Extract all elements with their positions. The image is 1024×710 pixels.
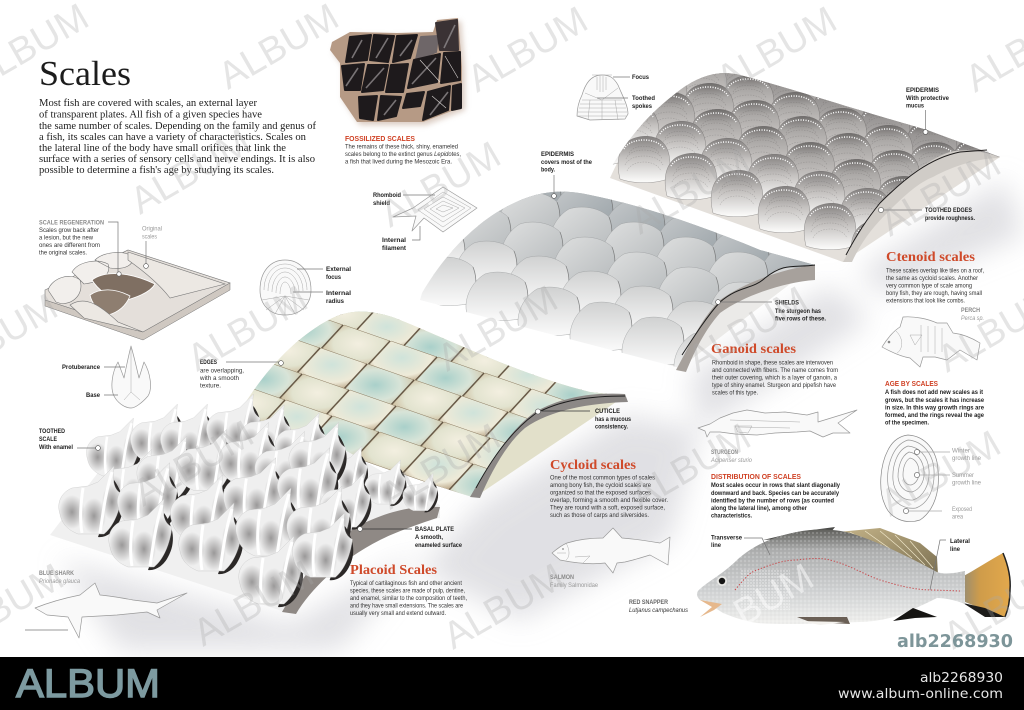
watermarks: ALBUM — [436, 556, 571, 658]
ganoid scales text: Ganoid scales — [711, 342, 797, 357]
watermarks: ALBUM — [460, 0, 595, 101]
epidermis label ganoid — [541, 152, 593, 198]
footer url: www.album-online.com — [838, 686, 1003, 702]
distribution of scales text: Most scales occur in rows that slant diagonally — [711, 483, 841, 489]
watermarks: ALBUM — [124, 121, 258, 223]
cuticle band — [470, 394, 628, 498]
sturgeon label — [710, 450, 753, 464]
rhomboid shield diagram: Internal — [382, 238, 406, 244]
watermarks: ALBUM — [430, 278, 565, 380]
external/internal focus diagram: radius — [326, 299, 345, 305]
external/internal focus diagram: Internal — [326, 291, 351, 297]
cuticle label: CUTICLE — [595, 409, 620, 415]
cuticle label: consistency. — [595, 424, 628, 430]
toothed scale label: TOOTHED — [39, 429, 66, 435]
soft shadows under sheets — [60, 180, 1024, 650]
ganoid scales text: scales of this type. — [712, 390, 758, 396]
edges label: with a smooth — [199, 376, 239, 382]
intro paragraph: a fish, its scales can have a variety of characteristics. Scales on — [39, 132, 307, 143]
blue shark label — [39, 571, 81, 585]
cuticle label: has a mucous — [595, 417, 632, 423]
growth ring scale diagram: area — [952, 514, 964, 520]
red snapper fish photograph — [695, 525, 1010, 625]
watermarks: ALBUM — [186, 553, 321, 655]
fossilized scales text: scales belong to the extinct genus Lepidotes, — [345, 152, 461, 158]
age by scales text: formed, and the rings reveal the age — [885, 413, 985, 419]
cycloid scales text — [550, 458, 668, 519]
growth ring scale diagram — [881, 435, 982, 522]
watermarks: ALBUM — [126, 413, 261, 515]
toothed edges label: provide roughness. — [925, 216, 975, 222]
title: Scales — [39, 54, 131, 93]
shields band — [676, 265, 815, 372]
age by scales text: A fish does not add new scales as it — [885, 390, 983, 396]
intro paragraph: possible to determine a fish's age by studying its scales. — [39, 165, 274, 176]
watermarks: ALBUM — [710, 0, 844, 101]
scale regeneration block: SCALE REGENERATION — [39, 220, 104, 226]
epidermis label ganoid: body. — [541, 168, 555, 174]
illustration: ganoid scales sheet — [420, 192, 816, 372]
age by scales text: grows, but the scales it has increase — [885, 398, 985, 404]
ctenoid scales text: very common type of scale among — [886, 284, 972, 290]
ctenoid scales text — [886, 250, 984, 304]
footer bar — [0, 657, 1024, 710]
red snapper label: RED SNAPPER — [629, 600, 669, 606]
salmon label — [550, 575, 599, 589]
blue shark label: Prionace glauca — [39, 579, 81, 585]
tail — [960, 553, 1010, 617]
edges label: EDGES — [200, 360, 217, 366]
cycloid scales text: organized so that the exposed surfaces — [550, 490, 651, 496]
salmon label: Family Salmonidae — [550, 583, 599, 589]
placoid scales text: usually very small and extend outward. — [350, 611, 446, 617]
watermarks: ALBUM — [624, 416, 758, 518]
ctenoid scales text: extensions that look like combs. — [886, 298, 965, 304]
rhomboid shield diagram: shield — [373, 201, 390, 207]
ganoid scales text: their outer covering, which is a layer of ganoin, a — [712, 376, 838, 382]
scale regeneration block: Scales grow back after — [39, 228, 99, 234]
distribution of scales text: along the lateral line), among other — [711, 506, 808, 512]
growth ring scale diagram: Exposed — [952, 507, 972, 513]
ganoid scales text: and connected with fibers. The name comes from — [712, 368, 838, 374]
red snapper label — [629, 600, 688, 614]
ganoid scales text: Rhomboid in shape, these scales are interwoven — [712, 360, 833, 366]
intro paragraph: the same number of scales. Depending on the family and genus of — [39, 121, 316, 132]
cycloid scales text: overlap, forming a smooth and flexible cover. — [550, 498, 668, 504]
ctenoid scales text: the same as cycloid scales. Another — [886, 276, 978, 282]
body — [697, 529, 965, 624]
placoid scales text: species, these scales are made of pulp, dentine, — [350, 588, 465, 594]
basal plate label: BASAL PLATE — [415, 527, 454, 533]
shields label — [716, 300, 826, 322]
red snapper label: Lutjanus campechanus — [629, 608, 688, 614]
age by scales text: of the specimen. — [885, 420, 929, 426]
distribution of scales text: identified by the number of rows (as counted — [711, 498, 834, 504]
toothed edge band — [843, 150, 1000, 262]
fossilized scales text — [345, 136, 461, 166]
watermarks: ALBUM — [680, 279, 815, 381]
watermarks: ALBUM — [180, 278, 315, 380]
scale regeneration block: ones are different from — [39, 243, 100, 249]
illustration: ctenoid scales sheet — [610, 73, 1000, 262]
age by scales text: in size. In this way growth rings are — [885, 406, 985, 412]
lateral line label: line — [950, 547, 961, 553]
lateral line label: Lateral — [950, 539, 970, 545]
distribution of scales text: downward and back. Species can be accurately — [711, 491, 840, 497]
transverse line label: Transverse — [711, 536, 743, 542]
toothed scale label: SCALE — [39, 437, 57, 443]
growth ring scale diagram: growth line — [952, 480, 982, 486]
scale regeneration block: the original scales. — [39, 250, 87, 256]
transverse line label: line — [711, 543, 722, 549]
watermarks: ALBUM — [374, 134, 508, 236]
salmon outline icon — [552, 528, 670, 573]
perch label — [961, 308, 984, 322]
placoid scales text: Placoid Scales — [350, 563, 438, 578]
placoid scales text: and enamel, similar to the composition of teeth, — [350, 596, 467, 602]
eye — [717, 576, 727, 586]
intro paragraph: the lateral line of the body have small orifices that link the — [39, 143, 286, 154]
distribution of scales text: DISTRIBUTION OF SCALES — [711, 474, 801, 481]
ctenoid scales text: bony fish, they are rough, having small — [886, 291, 982, 297]
cycloid scales text: Cycloid scales — [550, 458, 637, 473]
fossilized scales text: The remains of these thick, shiny, enameled — [345, 144, 458, 150]
fossilized scales text: a fish that lived during the Mesozoic Era. — [345, 160, 452, 166]
watermarks: ALBUM — [374, 416, 508, 518]
age by scales text: AGE BY SCALES — [885, 381, 938, 388]
watermarks: ALBUM — [686, 556, 821, 658]
epidermis label ganoid: EPIDERMIS — [541, 152, 574, 158]
ctenoid scales text: Ctenoid scales — [886, 250, 976, 265]
cycloid scales text: among bony fish, the cycloid scales are — [550, 483, 652, 489]
epidermis label ctenoid: EPIDERMIS — [906, 88, 939, 94]
scale regeneration block: a lesion, but the new — [39, 236, 94, 242]
distribution of scales text: characteristics. — [711, 514, 752, 520]
age by scales text — [885, 381, 985, 426]
external/internal focus diagram: External — [326, 267, 351, 273]
basal plate label: enameled surface — [415, 543, 463, 549]
image id stamp: alb2268930 — [897, 631, 1013, 652]
toothed scale label: With enamel — [39, 445, 73, 451]
basal plate label — [358, 527, 463, 549]
placoid scales text: Typical of cartilaginous fish and other ancient — [350, 581, 462, 587]
watermarks: ALBUM — [874, 423, 1008, 525]
perch label: PERCH — [961, 308, 980, 314]
ctenoid scales text: These scales overlap like tiles on a roof, — [886, 268, 984, 274]
perch outline icon — [882, 317, 980, 367]
edges label: texture. — [200, 384, 221, 390]
fossil photograph — [330, 18, 465, 125]
focus and spokes diagram — [577, 75, 655, 120]
sturgeon label: Acipenser sturio — [710, 458, 753, 464]
regeneration illustration — [45, 222, 230, 340]
edges label: are overlapping, — [200, 368, 244, 374]
illustration: cycloid scales sheet — [247, 312, 628, 498]
footer id: alb2268930 — [920, 670, 1003, 686]
shark outline icon — [25, 583, 187, 638]
focus and spokes diagram: Toothed — [632, 96, 655, 102]
toothed scale diagram — [62, 346, 151, 408]
intro paragraph: of transparent plates. All fish of a given species have — [39, 110, 262, 120]
salmon label: SALMON — [550, 575, 574, 581]
mouth — [700, 600, 722, 617]
placoid scales text: and they have small extensions. The scales are — [350, 604, 464, 610]
lower fins — [893, 608, 937, 621]
growth ring scale diagram: Summer — [952, 473, 974, 479]
sturgeon outline icon — [698, 410, 857, 437]
dorsal fin — [838, 528, 938, 575]
edges label — [199, 360, 283, 390]
rhomboid shield diagram: filament — [382, 246, 406, 252]
fossilized scales text: FOSSILIZED SCALES — [345, 136, 415, 143]
intro paragraph — [39, 98, 316, 176]
sturgeon label: STURGEON — [711, 450, 738, 456]
perch label: Perca sp. — [961, 316, 984, 322]
shields label: SHIELDS — [775, 300, 799, 306]
footer logo: ALBUM — [16, 662, 160, 706]
toothed scale diagram: Base — [86, 393, 101, 399]
cycloid scales text: They are round with a soft, exposed surface, — [550, 506, 665, 512]
cuticle label — [535, 409, 632, 430]
blue shark label: BLUE SHARK — [39, 571, 75, 577]
external/internal focus diagram — [260, 260, 351, 315]
watermarks: ALBUM — [624, 141, 758, 243]
focus and spokes diagram: Focus — [632, 75, 650, 81]
toothed edges label — [878, 207, 975, 222]
scale regeneration block: Original — [142, 226, 162, 232]
toothed scale diagram: Protuberance — [62, 365, 101, 371]
lateral line — [735, 558, 960, 591]
watermarks: ALBUM — [874, 143, 1008, 245]
basal plate label: A smooth, — [415, 535, 443, 541]
transverse line label — [711, 536, 770, 555]
cycloid scales text: such as those of carps and silversides. — [550, 513, 649, 519]
distribution of scales text — [711, 474, 841, 520]
epidermis label ganoid: covers most of the — [541, 160, 593, 166]
scale regeneration block — [39, 220, 162, 256]
epidermis label ctenoid — [906, 88, 950, 134]
lateral line label — [930, 539, 970, 590]
basal plate — [50, 430, 440, 612]
shields label: five rows of these. — [775, 316, 826, 322]
focus and spokes diagram: spokes — [632, 104, 653, 110]
cycloid scales text: One of the most common types of scales — [550, 476, 655, 482]
epidermis label ctenoid: With protective — [906, 96, 950, 102]
intro paragraph: Most fish are covered with scales, an external layer — [39, 98, 257, 109]
illustration: placoid toothed scales sheet — [50, 394, 440, 614]
growth ring scale diagram: Winter — [952, 448, 970, 454]
ganoid scales text — [711, 342, 838, 396]
external/internal focus diagram: focus — [326, 275, 342, 281]
placoid scales text — [350, 563, 467, 617]
toothed scale label — [39, 429, 100, 451]
rhomboid shield diagram — [373, 187, 477, 252]
scale regeneration block: scales — [142, 234, 157, 240]
growth ring scale diagram: growth line — [952, 456, 982, 462]
shields label: The sturgeon has — [775, 309, 822, 315]
toothed edges label: TOOTHED EDGES — [925, 208, 972, 214]
epidermis label ctenoid: mucus — [906, 104, 925, 110]
rhomboid shield diagram: Rhomboid — [373, 193, 401, 199]
intro paragraph: surface with a series of sensory cells and nerve endings. It is also — [39, 154, 315, 165]
ganoid scales text: type of shiny enamel. Sturgeon and pipefish have — [712, 383, 837, 389]
